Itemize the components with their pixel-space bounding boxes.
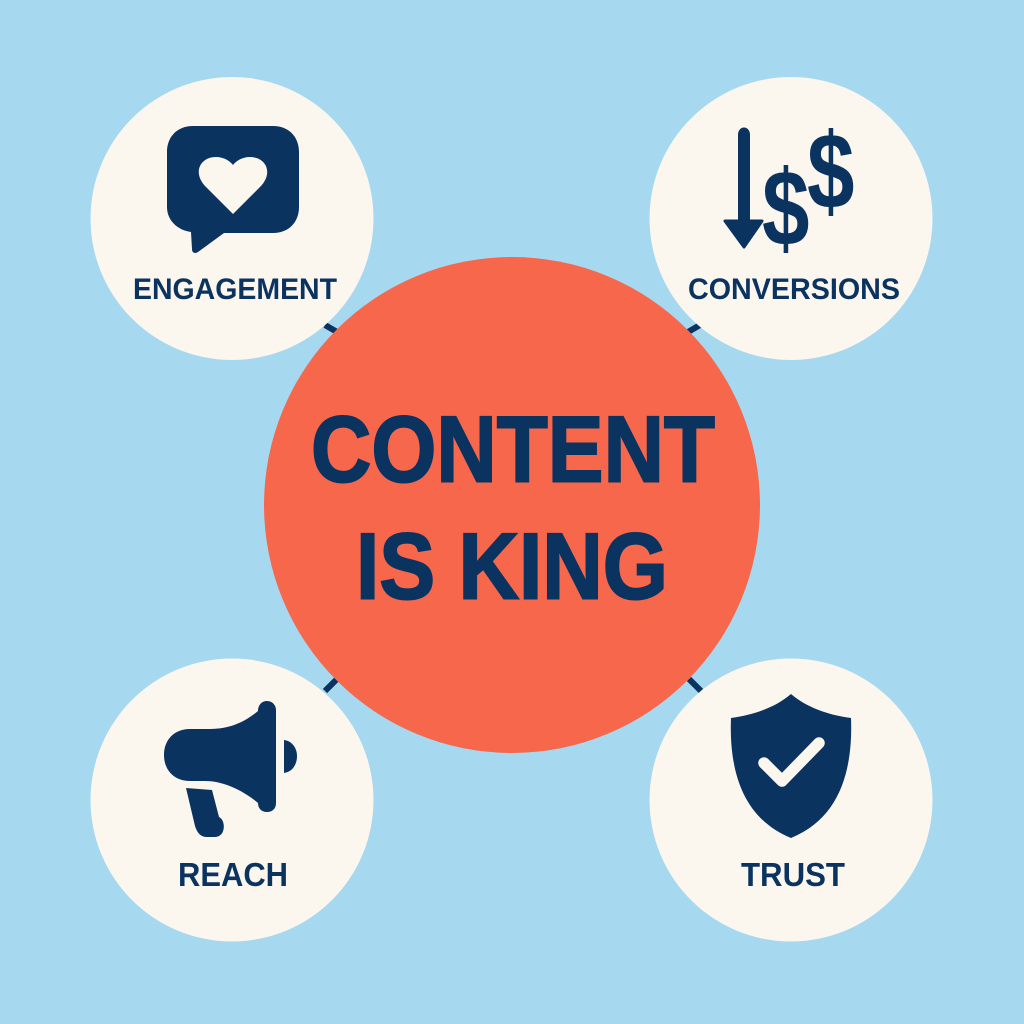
label: conversions: CONVERSIONS [688, 273, 900, 306]
panel: engagement [90, 77, 374, 360]
connector: conversions to centre [688, 325, 700, 332]
label: reach: REACH [178, 856, 288, 893]
icon: shield with check [731, 694, 851, 838]
panel: reach [90, 658, 374, 942]
panel: trust [650, 658, 932, 942]
title line 2: IS KING [356, 514, 668, 618]
icon: down arrow and dollar signs: $ [762, 147, 809, 268]
title line 1: CONTENT [311, 396, 715, 502]
icon: down arrow and dollar signs: $ [807, 110, 854, 231]
icon: down arrow and dollar signs [725, 110, 854, 268]
panel: conversions [650, 77, 932, 360]
label: engagement: ENGAGEMENT [133, 273, 337, 306]
connector: trust to centre [689, 679, 701, 691]
icon: megaphone [164, 701, 297, 837]
connector: engagement to centre [325, 325, 337, 332]
label: trust: TRUST [741, 856, 845, 893]
icon: speech bubble with heart [167, 126, 299, 253]
connector: reach to centre [325, 679, 337, 691]
central circle: content is king [264, 257, 760, 753]
